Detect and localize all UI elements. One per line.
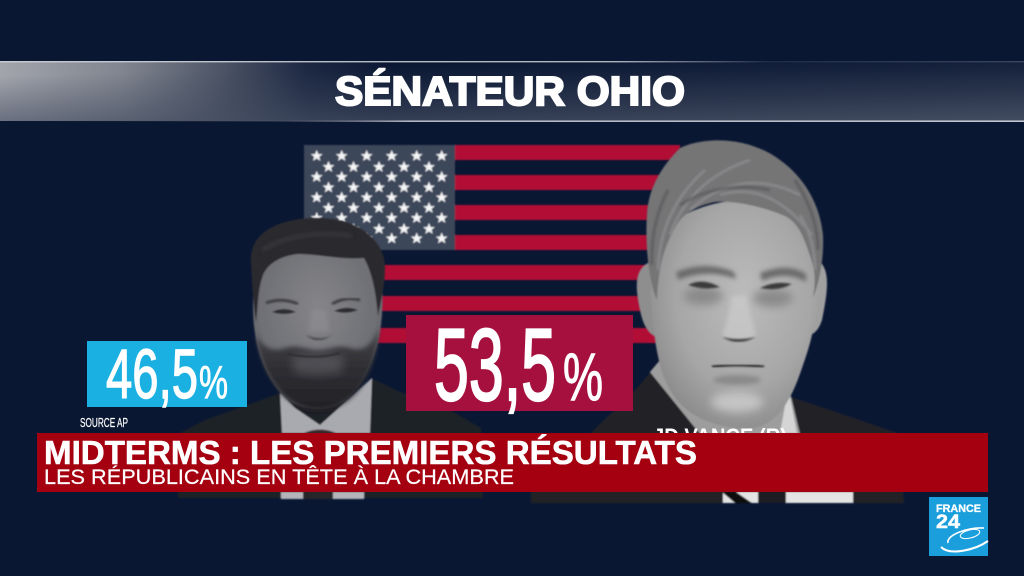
icon: american flag: [304, 145, 680, 343]
candidate name: JD VANCE (R): [653, 424, 787, 449]
headline: MIDTERMS : LES PREMIERS RÉSULTATS: [44, 434, 697, 472]
news banner: [37, 433, 988, 492]
result box: 46,5%: 46,5: [106, 335, 198, 413]
result box: 53,5%: 53,5: [434, 308, 556, 422]
hair: [646, 140, 823, 300]
face: [253, 240, 383, 409]
title band: [0, 61, 1024, 122]
suit: [178, 378, 483, 498]
face: [651, 200, 820, 429]
beard: [256, 328, 379, 410]
logo: France 24: [929, 497, 988, 556]
nose: [306, 335, 332, 340]
logo: France 24: 24: [936, 512, 960, 533]
tie knot: [304, 430, 336, 433]
ears: [637, 262, 662, 338]
shirt collar: [280, 378, 372, 433]
shirt collar: [650, 360, 800, 434]
logo: France 24: FRANCE: [936, 503, 981, 515]
result box: 46,5%: %: [199, 356, 228, 408]
eyes: [688, 281, 720, 289]
source: SOURCE AP: [80, 416, 128, 430]
suit: [531, 370, 904, 503]
mouth: [288, 353, 340, 357]
portrait: right candidate: [531, 140, 904, 503]
mouth: [712, 365, 764, 367]
brows: [266, 299, 360, 304]
nose: [722, 296, 756, 341]
result box: 53,5%: %: [563, 340, 603, 415]
hair: [251, 218, 385, 322]
brows and eye sockets: [676, 266, 736, 280]
eyes: [272, 309, 296, 314]
portrait: left candidate: [178, 218, 483, 499]
title: SÉNATEUR OHIO: [335, 68, 685, 114]
subheadline: LES RÉPUBLICAINS EN TÊTE À LA CHAMBRE: [44, 466, 514, 489]
hair texture: [658, 160, 815, 270]
